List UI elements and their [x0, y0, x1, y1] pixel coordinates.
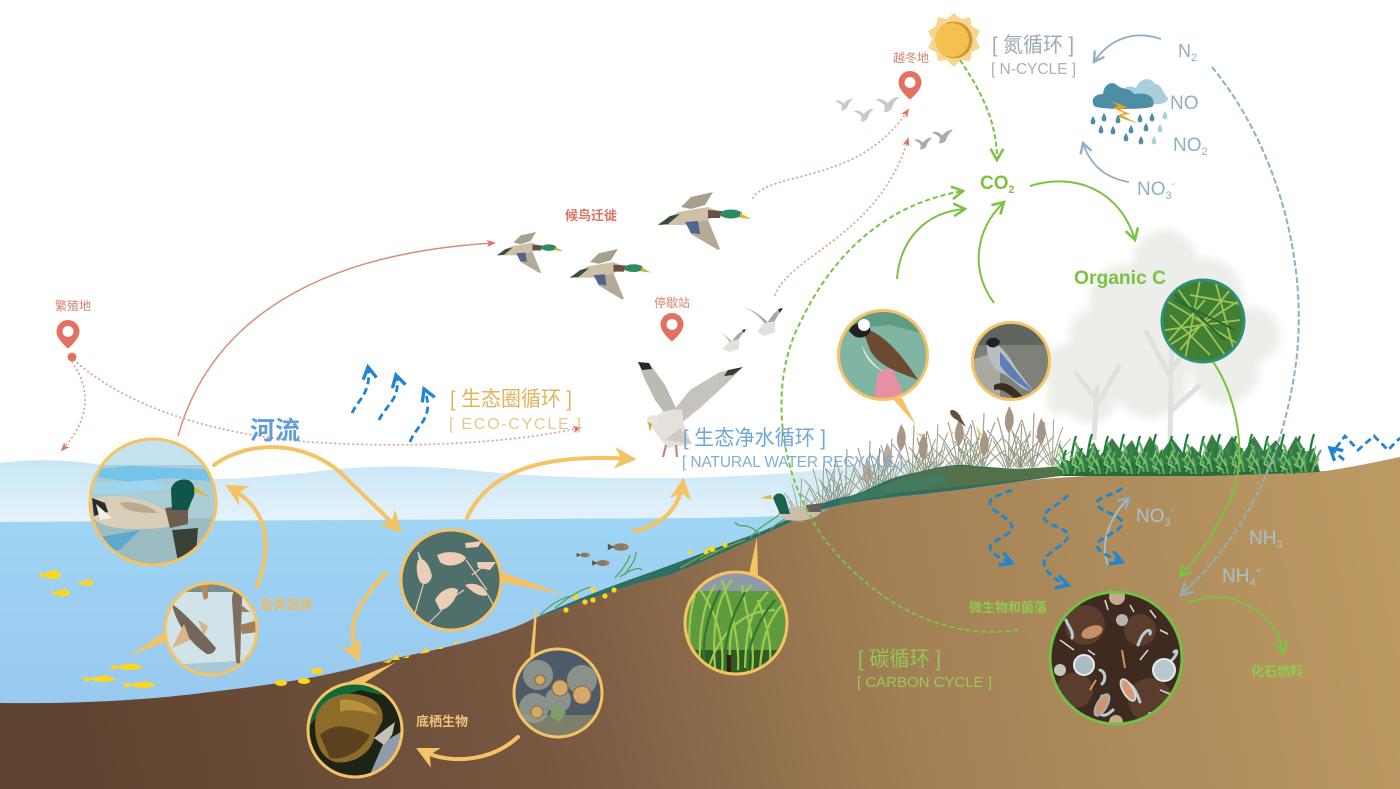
panel: shoreline vegetation band — [520, 465, 1060, 625]
panel: soil ground — [0, 457, 1400, 789]
icon: small carp school — [577, 543, 629, 566]
circle: swimming fish — [164, 582, 258, 680]
arrow: migration route — [178, 243, 494, 436]
circle: crested bulbul on lotus — [838, 310, 928, 400]
arrows: orange food-web flows — [214, 447, 683, 759]
icon: rain cloud — [1091, 79, 1168, 144]
heading: natural water recycle — [682, 427, 903, 471]
label: migratory birds: 候鸟迁徙 — [565, 208, 617, 223]
heading: carbon cycle — [857, 648, 992, 691]
label: Organic C: Organic C — [1074, 268, 1166, 289]
label: NH3: NH — [1249, 528, 1276, 549]
label: soil NO3 minus: 3 — [1164, 517, 1171, 529]
circle: soil microbes — [1049, 589, 1183, 729]
heading: carbon cycle: [ 碳循环 ] — [858, 648, 941, 671]
label: microbes: 微生物和菌落 — [969, 600, 1047, 615]
heading: nitrogen cycle: [ N-CYCLE ] — [991, 61, 1076, 78]
labels: English/Chinese text — [55, 34, 1303, 729]
heading: eco-cycle: [ ECO-CYCLE ] — [449, 416, 581, 433]
label: CO2: 2 — [1008, 184, 1015, 196]
label: fish migration: 鱼类洄游 — [260, 597, 312, 612]
circle: apple snail — [306, 681, 404, 779]
circle: mallard on water — [88, 437, 220, 570]
circle: azure-winged magpie — [972, 322, 1052, 402]
label: NO2: NO — [1173, 135, 1202, 156]
label: NO3 minus: 3 — [1166, 190, 1172, 202]
arrows: nitrogen cycle — [1083, 35, 1299, 595]
panel: shallow river water — [0, 460, 970, 525]
label: NH4 plus: 4 — [1249, 577, 1256, 589]
icon: flying mallards — [497, 192, 751, 299]
circle: zooplankton — [400, 528, 504, 632]
circle: green leaf blades — [1160, 278, 1246, 364]
label: NH4 plus: + — [1256, 566, 1262, 577]
label: N2: N — [1178, 41, 1191, 61]
heading: nitrogen cycle — [991, 34, 1076, 78]
icon: large seagull — [638, 362, 743, 457]
icon: mallard on shore — [760, 493, 823, 521]
panel: dense green grass — [1054, 434, 1321, 476]
label: soil NO3 minus: - — [1171, 506, 1174, 517]
label: NH3: 3 — [1276, 539, 1283, 551]
icon: distant gray birds — [835, 97, 953, 149]
heading: natural water recycle: [ 生态净水循环 ] — [683, 427, 826, 450]
arrows: blue water flow squiggles — [352, 367, 1400, 585]
panel: shore grass — [540, 512, 800, 615]
label: CO2: CO — [980, 173, 1008, 194]
circle: microscopic algae — [513, 648, 603, 740]
label: NO3 minus: NO — [1137, 179, 1166, 200]
icon: sun — [928, 13, 980, 67]
panel: reed plumes — [863, 406, 1046, 485]
heading: eco-cycle — [449, 388, 581, 433]
label: N2: 2 — [1191, 52, 1197, 64]
icon: yellow fish school — [40, 569, 155, 688]
heading: nitrogen cycle: [ 氮循环 ] — [992, 34, 1074, 57]
icon: flying gulls — [712, 307, 783, 352]
panel: background trees — [1042, 230, 1280, 445]
label: stopover: 停歇站 — [654, 295, 690, 310]
heading: carbon cycle: [ CARBON CYCLE ] — [857, 674, 992, 691]
label: NO2: 2 — [1202, 146, 1208, 158]
label: fossil fuel: 化石燃料 — [1251, 664, 1303, 679]
arrows: dotted migration routes — [62, 110, 908, 450]
panel: reeds — [781, 410, 1072, 522]
yellow benthic markers — [275, 542, 728, 686]
heading: river: 河流 — [250, 417, 300, 445]
label: NO3 minus: - — [1172, 179, 1175, 190]
panel: deep river water — [0, 512, 840, 720]
label: benthic organisms: 底栖生物 — [416, 714, 468, 729]
arrows: carbon cycle — [781, 60, 1283, 653]
label: wintering ground: 越冬地 — [893, 50, 929, 65]
label: breeding ground: 繁殖地 — [55, 298, 91, 313]
label: NH4 plus: NH — [1222, 566, 1249, 587]
label: soil NO3 minus: NO — [1136, 506, 1164, 527]
icon: small perched bird — [950, 410, 966, 427]
circle: aquatic grass — [684, 571, 788, 677]
pointer wedges — [129, 398, 983, 683]
heading: natural water recycle: [ NATURAL WATER RECYCLE ] — [682, 454, 903, 471]
label: NO: NO — [1170, 93, 1198, 114]
heading: eco-cycle: [ 生态圈循环 ] — [450, 388, 572, 411]
icon: location pins — [56, 71, 922, 362]
